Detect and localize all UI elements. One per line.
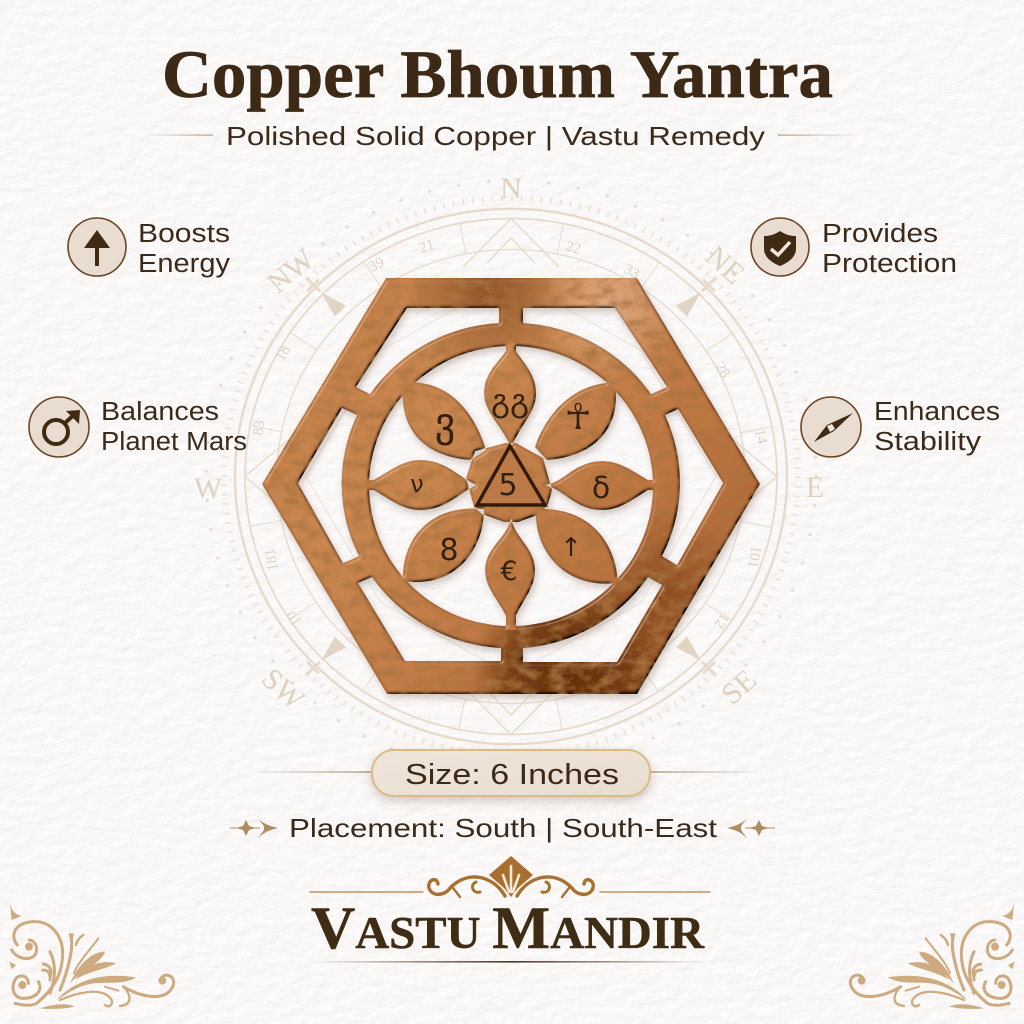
compass direction labels: N — [500, 172, 522, 205]
compass degree numerals — [250, 237, 770, 631]
label: Stability — [874, 428, 981, 456]
compass direction labels: NE — [699, 239, 751, 291]
logo crest — [310, 856, 710, 897]
ornament: left sparkle — [230, 818, 278, 839]
size badge — [245, 750, 765, 796]
compass degree numerals: 28 — [712, 360, 733, 381]
compass degree numerals: 12 — [711, 610, 732, 631]
logo: Vastu Mandir — [310, 856, 710, 963]
placement line — [230, 813, 775, 843]
label: Energy — [138, 250, 230, 278]
engraved symbols: € — [500, 556, 518, 587]
engraved symbols — [410, 383, 610, 587]
label: Protection — [822, 250, 957, 278]
ornament: right sparkle — [727, 818, 775, 839]
label — [822, 220, 957, 278]
engraved symbols: ვ — [435, 400, 455, 446]
engraved symbols: 5 — [498, 468, 518, 503]
label: Provides — [822, 220, 938, 248]
compass direction labels: W — [194, 472, 223, 505]
icon: compass needle — [801, 397, 861, 457]
compass degree numerals: 18 — [273, 343, 294, 364]
compass degree numerals: 14 — [751, 428, 770, 446]
icon: mars symbol — [29, 397, 89, 457]
compass degree numerals: 39 — [366, 254, 387, 276]
compass direction labels: SE — [715, 663, 763, 711]
engraved symbols: გგ — [491, 383, 529, 419]
engraved symbols: ν — [410, 470, 424, 498]
icon: up arrow — [68, 218, 126, 276]
icon: shield with check — [751, 218, 809, 276]
feature: balances planet mars — [29, 397, 247, 457]
copper yantra plate — [262, 278, 760, 694]
compass direction labels: NW — [261, 242, 321, 300]
compass direction labels: SW — [255, 662, 311, 717]
feature: provides protection — [751, 218, 957, 278]
size badge: Size: 6 Inches — [405, 759, 619, 791]
label — [874, 398, 1000, 456]
feature: boosts energy — [68, 218, 230, 278]
title: Copper Bhoum Yantra — [162, 36, 833, 112]
compass degree numerals: 101 — [744, 544, 764, 569]
compass star points — [245, 218, 777, 735]
label — [101, 398, 247, 456]
compass direction labels — [194, 172, 824, 717]
placement line: Placement: South | South-East — [289, 813, 718, 843]
label: Enhances — [874, 398, 1000, 426]
label: Planet Mars — [101, 428, 247, 456]
engraved symbols: ↑ — [560, 533, 582, 563]
diagonal pointers — [321, 292, 701, 661]
corner ornament: bottom left — [9, 904, 174, 1009]
diagonal fleurons — [307, 279, 715, 674]
compass degree numerals: 22 — [564, 238, 583, 258]
label: Boosts — [138, 220, 230, 248]
compass degree numerals: 83 — [250, 419, 269, 437]
metal body — [262, 278, 760, 694]
compass degree numerals: 33 — [621, 261, 642, 283]
wordmark: VASTU MANDIR — [311, 895, 705, 961]
compass degree numerals: 181 — [262, 547, 282, 572]
engraved symbols: δ — [592, 471, 610, 506]
engraved symbols: ☥ — [565, 397, 591, 438]
engraved symbols: 8 — [439, 533, 459, 568]
subtitle with side rules: Polished Solid Copper | Vastu Remedy — [226, 121, 765, 151]
compass degree numerals: 10 — [284, 607, 305, 629]
central triangle — [477, 446, 545, 505]
feature: enhances stability — [801, 397, 1000, 457]
label: Balances — [101, 398, 219, 426]
label — [138, 220, 230, 278]
compass rose watermark — [206, 181, 816, 772]
corner ornament: bottom right — [850, 904, 1015, 1009]
compass degree numerals: 21 — [417, 237, 437, 257]
compass direction labels: E — [806, 471, 824, 504]
